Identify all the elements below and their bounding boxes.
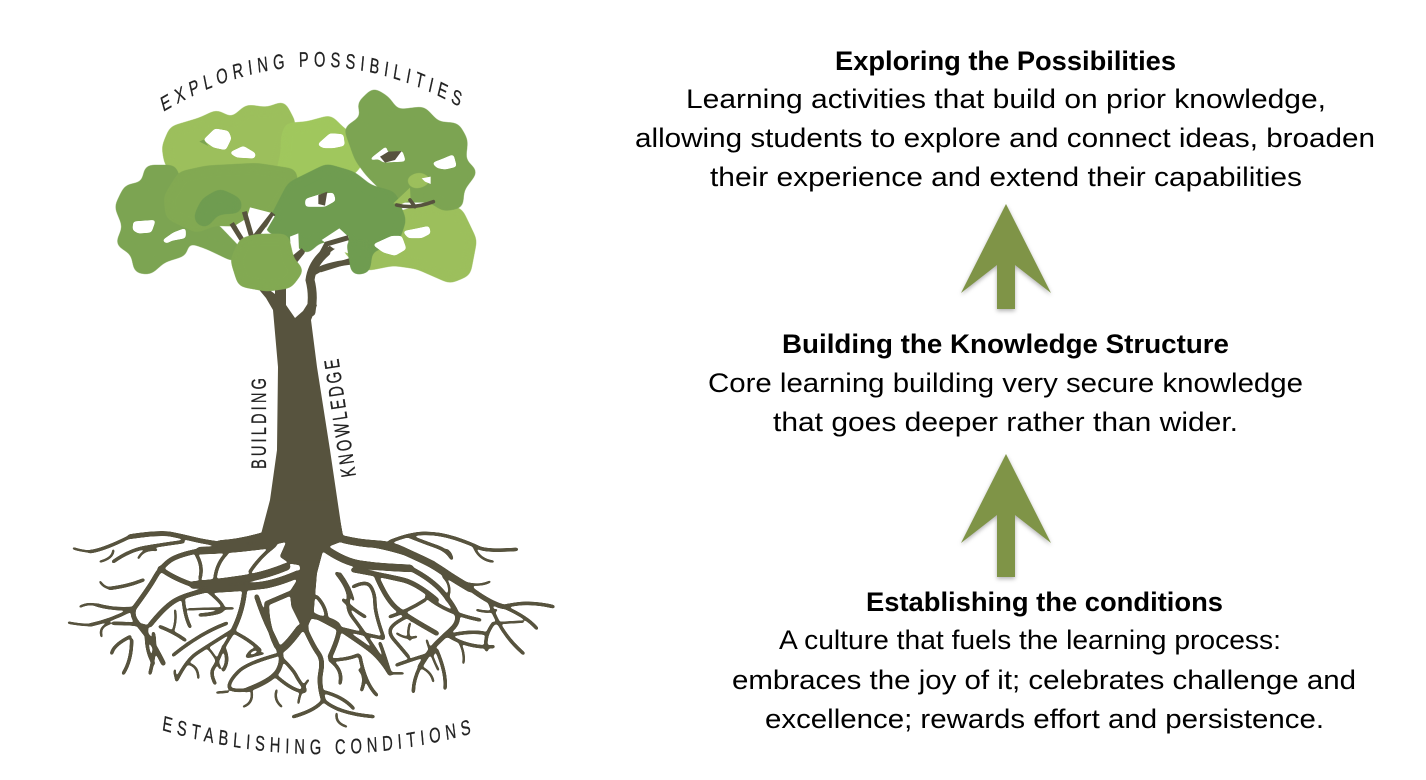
arrow: lower xyxy=(961,454,1051,577)
heading: Building the Knowledge Structure xyxy=(782,329,1229,359)
trunk and branches xyxy=(233,212,350,538)
description: that goes deeper rather than wider. xyxy=(773,407,1238,437)
tree illustration xyxy=(68,52,555,754)
text block: establishing the conditions xyxy=(732,587,1356,734)
roots xyxy=(68,500,553,727)
heading: Establishing the conditions xyxy=(866,587,1223,617)
text block: building the knowledge structure xyxy=(708,329,1303,437)
heading: Exploring the Possibilities xyxy=(835,46,1176,76)
description xyxy=(732,625,1356,734)
vertical label: building: BUILDING xyxy=(247,375,271,469)
description xyxy=(708,368,1303,437)
description: excellence; rewards effort and persistence. xyxy=(765,704,1324,734)
vertical label: knowledge: KNOWLEDGE xyxy=(320,355,361,479)
description: A culture that fuels the learning process: xyxy=(779,625,1281,655)
description: their experience and extend their capabilities xyxy=(710,162,1302,192)
description: embraces the joy of it; celebrates challenge and xyxy=(732,665,1356,695)
description: allowing students to explore and connect ideas, broaden xyxy=(635,123,1375,153)
curved label: exploring possibilities: EXPLORING POSSIBILITIES xyxy=(160,52,462,112)
canopy xyxy=(115,89,477,290)
curved label: establishing conditions: ESTABLISHING CONDITIONS xyxy=(162,716,470,754)
description xyxy=(635,84,1375,192)
canopy gaps and visible branches xyxy=(133,129,457,290)
description: Core learning building very secure knowledge xyxy=(708,368,1303,398)
arrow: upper xyxy=(961,204,1051,309)
text block: exploring the possibilities xyxy=(635,46,1375,192)
description: Learning activities that build on prior knowledge, xyxy=(686,84,1326,114)
